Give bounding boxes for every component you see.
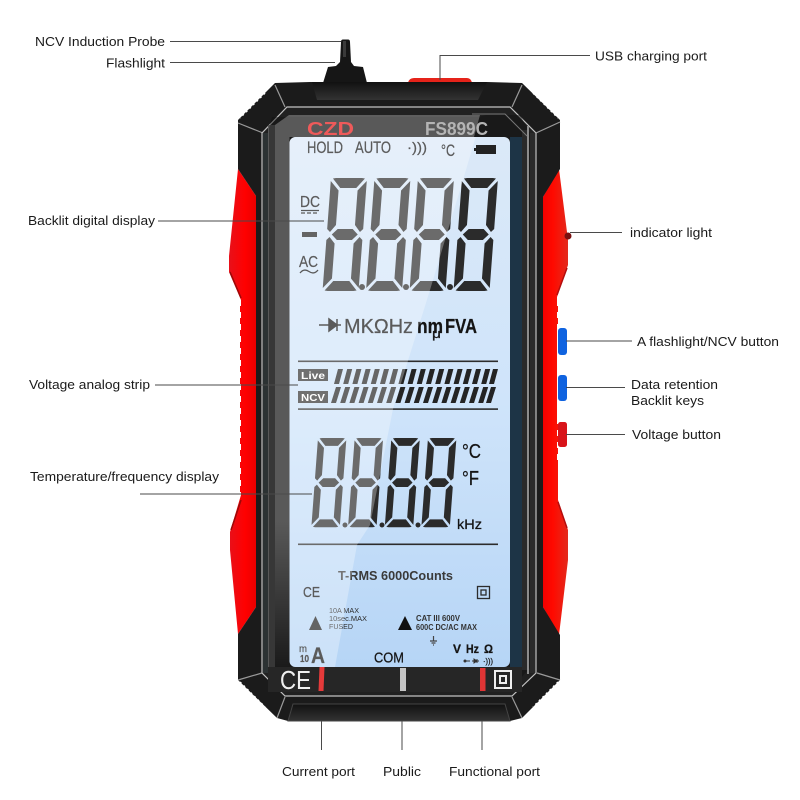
- volt terminal label: Ω: [484, 642, 493, 656]
- analog bar graph: [331, 369, 498, 403]
- label: current port: Current port: [282, 764, 355, 779]
- current port mark: [318, 667, 324, 691]
- left red grip: [229, 169, 256, 634]
- volt terminal label: Hz: [466, 642, 479, 656]
- category warning: [398, 614, 478, 632]
- blue data retention button: [558, 375, 567, 401]
- label: NCV induction probe: NCV Induction Probe: [35, 34, 165, 49]
- label: USB charging port: USB charging port: [595, 48, 707, 64]
- icon: ground: [430, 636, 437, 645]
- T-RMS caption: T-RMS 6000Counts: [338, 568, 453, 583]
- upper status row: AUTO: [355, 138, 391, 157]
- left reflection strip: [275, 137, 290, 670]
- category warning: 600C DC/AC MAX: [416, 623, 478, 632]
- volt terminal label: [453, 642, 493, 666]
- right red grip: [543, 169, 568, 635]
- bottom strip: [268, 665, 522, 695]
- fuse warning: 10sec.MAX: [329, 614, 367, 623]
- double insulation mark: [495, 671, 511, 688]
- volt terminal label: V: [453, 642, 461, 656]
- label: flashlight: Flashlight: [106, 56, 165, 70]
- fuse warning: [309, 606, 367, 631]
- COM terminal label: COM: [374, 650, 404, 666]
- meter body: [238, 82, 560, 721]
- icon: double insulation: [478, 586, 490, 598]
- display frame: [262, 107, 536, 696]
- Live tag: [298, 369, 328, 382]
- LCD panel: [290, 137, 510, 667]
- screen glare: [290, 137, 476, 667]
- rule above analog strip: [298, 360, 498, 362]
- units row: [319, 316, 477, 341]
- DC AC indicators: AC: [299, 254, 318, 271]
- leader lines: [140, 42, 632, 750]
- label: temperature frequency display: Temperature/frequency display: [30, 469, 220, 484]
- public port mark: [400, 668, 406, 691]
- fuse warning: 10A MAX: [329, 606, 359, 615]
- upper status row: HOLD: [307, 138, 343, 157]
- units row: μ: [432, 326, 441, 341]
- label: data retention backlit keys: Backlit keys: [631, 393, 705, 408]
- units row: MKΩHz: [344, 316, 413, 338]
- red voltage button: [558, 422, 567, 447]
- amp terminal label: A: [311, 643, 325, 668]
- model FS899C: FS899C: [425, 119, 488, 139]
- Live tag: Live: [301, 371, 326, 382]
- label: indicator light: indicator light: [630, 225, 712, 240]
- label: public: Public: [383, 764, 422, 779]
- DC AC indicators: [299, 194, 320, 273]
- USB charging port: [408, 78, 472, 83]
- label: voltage button: Voltage button: [632, 427, 721, 442]
- right edge of screen: [510, 137, 522, 667]
- top reflection strip: [275, 115, 480, 137]
- units row: nm: [417, 316, 443, 338]
- upper status row: °C: [441, 141, 455, 160]
- indicator light: [564, 232, 572, 240]
- icon: diode: [319, 319, 341, 331]
- secondary four-digit display: [311, 438, 456, 528]
- top wedge: [312, 82, 487, 100]
- NCV tag: NCV: [301, 393, 325, 404]
- amp terminal label: [299, 643, 325, 668]
- small CE mark: CE: [303, 584, 320, 601]
- volt terminal label: ·))): [483, 657, 493, 666]
- rule below secondary display: [298, 544, 498, 545]
- label: data retention backlit keys: [631, 377, 718, 408]
- temperature and frequency units: kHz: [457, 516, 482, 532]
- amp terminal label: 10: [300, 654, 309, 665]
- functional port mark: [480, 668, 486, 691]
- NCV tag: [298, 391, 328, 404]
- rule below analog strip: [298, 408, 498, 410]
- label: data retention backlit keys: Data retention: [631, 377, 718, 392]
- DC AC indicators: DC: [300, 194, 320, 211]
- temperature and frequency units: °C: [462, 441, 481, 463]
- NCV probe and flashlight head: [323, 40, 367, 83]
- upper status row: [307, 138, 496, 160]
- main four-digit display: [323, 178, 498, 291]
- units row: FVA: [445, 316, 477, 338]
- label: functional port: Functional port: [449, 764, 540, 779]
- temperature and frequency units: [457, 441, 482, 532]
- label: flashlight NCV button: A flashlight/NCV button: [637, 334, 779, 349]
- icon: battery: [474, 145, 496, 154]
- amp terminal label: m: [299, 644, 307, 655]
- blue flashlight NCV button: [558, 328, 567, 355]
- fuse warning: FUSED: [329, 622, 354, 631]
- label: voltage analog strip: Voltage analog strip: [29, 377, 150, 392]
- CE mark: CE: [280, 665, 311, 695]
- brand CZD: CZD: [307, 119, 354, 139]
- temperature and frequency units: °F: [462, 468, 479, 490]
- upper status row: ·))): [407, 139, 427, 155]
- category warning: CAT III 600V: [416, 614, 461, 623]
- label: backlit digital display: Backlit digital display: [28, 213, 156, 228]
